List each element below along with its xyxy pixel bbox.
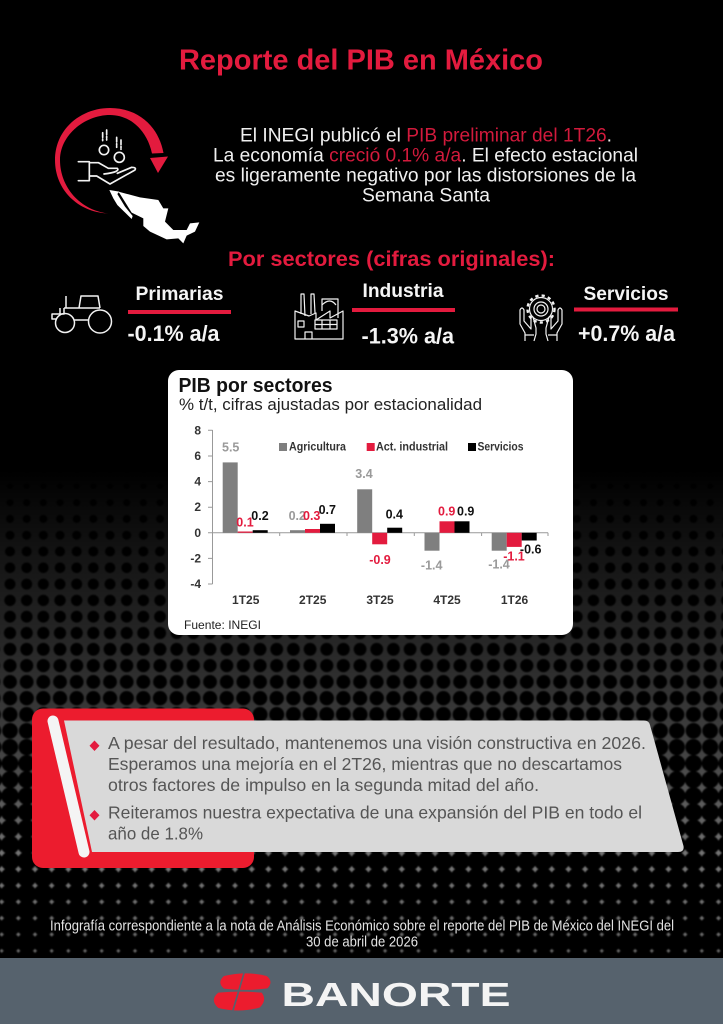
legend [279, 442, 524, 454]
icon: tractor [52, 296, 112, 333]
y axis labels: 0 [194, 526, 201, 540]
text block: first bullet: otros factores de impulso en la segunda mitad del año. [108, 775, 539, 795]
y axis labels: -4 [190, 577, 201, 591]
text block: introduction: Semana Santa [362, 184, 490, 206]
sector: industria [295, 281, 455, 348]
icon: circular arrow with hand, coins and map of Mexico [55, 108, 199, 243]
heading: primarias: Primarias [136, 284, 224, 305]
data labels [222, 441, 542, 572]
value: industria: -1.3% a/a [362, 324, 455, 348]
icon: hands holding a gear [520, 296, 562, 341]
y axis labels [190, 424, 201, 591]
y axis labels: 6 [194, 449, 201, 463]
y axis labels: 4 [194, 474, 201, 488]
legend: Agricultura [289, 442, 347, 454]
chart title: PIB por sectores [178, 375, 332, 397]
text block: introduction: La economía creció 0.1% a/a. El efecto estacional [213, 144, 638, 166]
data labels: -1.1 [503, 550, 525, 564]
chart source: Fuente: INEGI [184, 618, 261, 632]
data labels: 3.4 [355, 467, 373, 481]
legend: Servicios [478, 442, 524, 454]
data labels: 5.5 [222, 441, 239, 455]
heading: industria: Industria [362, 281, 444, 302]
text block: second bullet: Reiteramos nuestra expectativa de una expansión del PIB en todo el [108, 802, 642, 822]
y axis labels: -2 [190, 552, 201, 566]
data labels: -0.6 [520, 542, 542, 556]
x axis labels: 2T25 [299, 593, 327, 607]
value: servicios: +0.7% a/a [578, 321, 676, 346]
data labels: 0.9 [438, 505, 455, 519]
text block: first bullet: A pesar del resultado, mantenemos una visión constructiva en 2026. [108, 733, 646, 753]
data labels: 0.2 [289, 509, 306, 523]
logo wordmark: BANORTE [282, 977, 510, 1014]
text block: second bullet: año de 1.8% [108, 824, 203, 844]
logo mark [214, 972, 270, 1011]
icon: red circular arrow [55, 108, 168, 214]
bars: servicios [253, 521, 537, 540]
panel: chart PIB por sectores [168, 370, 573, 635]
bullet: diamond [90, 810, 100, 820]
data labels: 0.2 [251, 509, 269, 523]
bullet: diamond [90, 740, 100, 751]
bars: actividad industrial [238, 521, 522, 547]
chart subtitle: % t/t, cifras ajustadas por estacionalidad [179, 396, 482, 414]
x axis labels: 3T25 [366, 593, 394, 607]
data labels: 0.7 [319, 503, 336, 517]
footnote [50, 918, 674, 950]
data labels: -0.9 [369, 553, 391, 567]
data labels: -1.4 [488, 557, 510, 571]
data labels: 0.9 [457, 505, 474, 519]
heading: por sectores: Por sectores (cifras originales): [228, 247, 555, 271]
title: Reporte del PIB en México [179, 44, 543, 76]
chart axes [208, 430, 548, 584]
heading: servicios: Servicios [584, 284, 668, 305]
x axis labels: 1T25 [232, 593, 260, 607]
footer band with Banorte logo [0, 958, 723, 1024]
icon: hand receiving coins [78, 130, 135, 184]
text block: second bullet [108, 802, 642, 844]
footnote: 30 de abril de 2026 [306, 934, 418, 950]
data labels: -1.4 [421, 558, 443, 572]
data labels: 0.1 [236, 516, 254, 530]
data labels: 0.3 [303, 509, 320, 523]
sector: primarias [52, 284, 231, 346]
y axis labels: 8 [194, 424, 201, 438]
data labels: 0.4 [386, 507, 403, 521]
sector: servicios [520, 284, 678, 346]
text block: first bullet: Esperamos una mejoría en el 2T26, mientras que no descartamos [108, 754, 622, 774]
text block: introduction: es ligeramente negativo por las distorsiones de la [215, 164, 636, 186]
callout panel [32, 708, 684, 868]
text block: introduction [213, 124, 638, 206]
x axis labels: 1T26 [501, 593, 528, 607]
x axis labels [232, 593, 528, 607]
text block: first bullet [108, 733, 646, 795]
y axis labels: 2 [194, 500, 201, 514]
icon: factory [295, 294, 343, 339]
text block: introduction: El INEGI publicó el PIB preliminar del 1T26. [240, 124, 612, 146]
icon: map of Mexico [109, 190, 199, 243]
bars: agricultura [223, 462, 507, 551]
value: primarias: -0.1% a/a [128, 321, 220, 346]
x axis labels: 4T25 [433, 593, 461, 607]
legend: Act. industrial [376, 442, 448, 454]
